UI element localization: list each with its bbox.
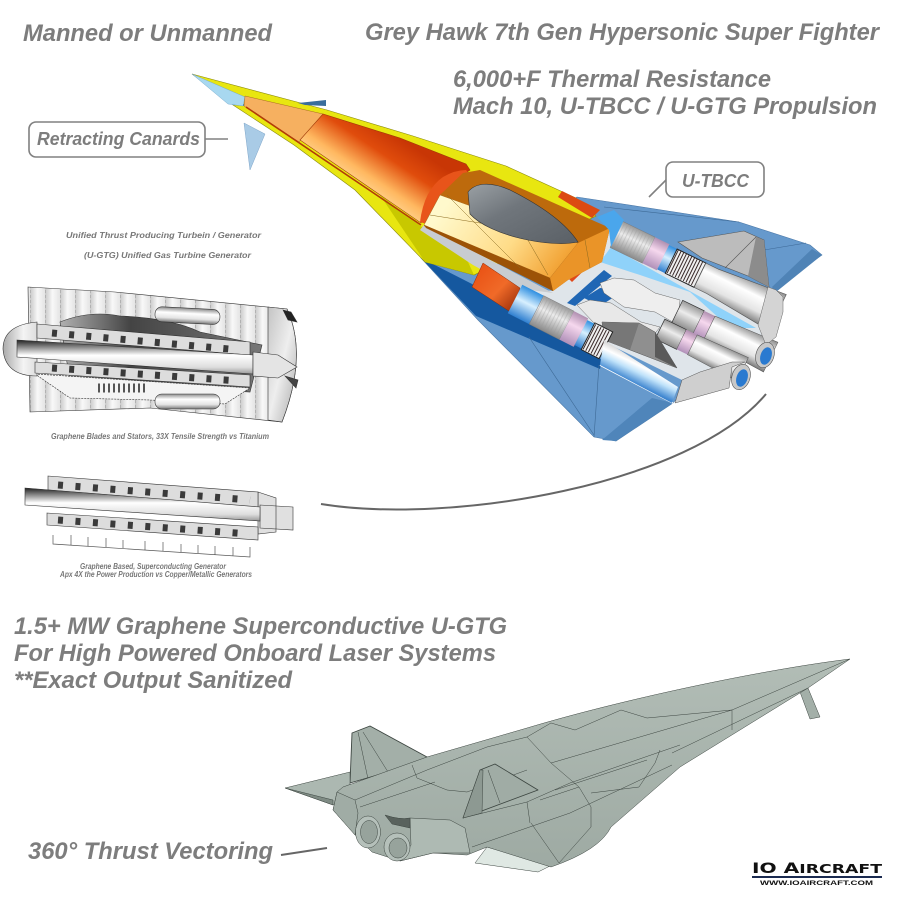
dark leading edge strip <box>421 258 602 369</box>
heading: specifications: Mach 10, U-TBCC / U-GTG Propulsion <box>453 93 877 120</box>
delta wing body <box>421 197 822 441</box>
callout: retracting canards: Retracting Canards <box>37 129 200 149</box>
title: grey hawk: Grey Hawk 7th Gen Hypersonic Super Fighter <box>365 19 881 46</box>
bay cooling duct <box>600 247 756 328</box>
lower row <box>47 513 258 540</box>
main orange fuselage <box>300 114 470 223</box>
rear fairing dark <box>385 815 410 828</box>
lower stator row <box>35 362 250 387</box>
rear housing <box>675 362 745 403</box>
tail cone <box>253 352 297 378</box>
wing facet dark <box>602 398 673 441</box>
orange arch frame <box>420 170 470 226</box>
dark vane <box>285 376 298 388</box>
fuselage <box>333 659 850 867</box>
red wedge under box <box>567 250 597 282</box>
lower pod <box>155 394 220 409</box>
upper red intake <box>558 191 600 218</box>
grey ellipse cavity <box>468 184 578 244</box>
callout: u-tbcc: U-TBCC <box>682 171 750 191</box>
nozzle upper <box>752 340 778 370</box>
lower red intake <box>472 263 520 313</box>
main cutaway aircraft <box>192 74 822 441</box>
wing highlight stripe <box>600 365 673 403</box>
upper stator blocks <box>52 333 240 350</box>
nacelle: upper right rear <box>670 297 778 372</box>
caption: generator <box>59 562 252 579</box>
shaft <box>25 488 260 521</box>
heading: laser power <box>14 613 507 694</box>
mid duct upper <box>600 278 680 325</box>
rear cowl lower <box>400 818 470 861</box>
nozzle right <box>384 833 410 861</box>
lower blocks <box>58 520 250 534</box>
forward orange section <box>244 96 323 142</box>
engine bay <box>520 230 776 380</box>
heading: laser power: 1.5+ MW Graphene Superconductive U-GTG <box>14 613 507 640</box>
nacelle: upper engine <box>608 216 786 330</box>
comb connector <box>53 535 250 557</box>
blue engine inlet cone <box>597 210 624 247</box>
fuselage panel lines <box>355 659 850 863</box>
dark blue nose edge <box>192 74 247 106</box>
callout: retracting canards <box>29 122 228 157</box>
dark inner compressor <box>60 314 262 392</box>
label: thrust vectoring: 360° Thrust Vectoring <box>28 838 273 865</box>
upper row <box>48 476 258 507</box>
shaft <box>17 340 253 374</box>
mid duct lower <box>577 300 660 340</box>
center fin <box>463 764 538 818</box>
upper pod <box>155 306 220 325</box>
canard <box>800 688 820 719</box>
upper blocks <box>58 485 250 500</box>
nozzle lower <box>728 362 754 392</box>
exterior aircraft <box>285 659 850 872</box>
dark rear edge <box>283 310 297 322</box>
turbine cutaway drawing <box>3 287 298 422</box>
dark blue bay frame <box>567 270 625 306</box>
lower fin <box>602 322 677 368</box>
red lower line <box>246 107 421 225</box>
hull lower shading <box>380 195 474 275</box>
logo: io aircraft <box>752 861 883 887</box>
logo: io aircraft: IO A IRCRAFT <box>752 861 883 877</box>
lower nacelle nozzle <box>600 340 678 403</box>
lower stator blocks <box>52 368 240 381</box>
lower fin <box>475 847 552 872</box>
nacelle: lower right rear <box>654 317 748 381</box>
light blue nose <box>192 74 245 106</box>
turbine blades light area <box>35 374 250 404</box>
generator drawing <box>25 476 293 557</box>
heading: specifications: 6,000+F Thermal Resistance <box>453 66 771 93</box>
connector arc <box>321 394 766 509</box>
icon: upper canard <box>298 100 326 106</box>
cutaway box <box>424 170 610 291</box>
left wing <box>285 772 350 805</box>
heading: specifications <box>453 66 877 120</box>
logo: io aircraft: WWW.IOAIRCRAFT.COM <box>760 880 873 887</box>
nacelle: lower engine <box>508 285 613 360</box>
end cap <box>258 492 293 534</box>
callout: u-tbcc <box>649 162 764 197</box>
text: turbine heading <box>66 231 262 260</box>
text: turbine heading: Unified Thrust Producing Turbein / Generator <box>66 231 262 240</box>
top fin <box>678 231 769 287</box>
icon: retracting canard <box>244 123 265 170</box>
caption: generator: Graphene Based, Superconducting Generator <box>80 562 227 571</box>
grey strip under box <box>420 225 553 293</box>
nozzle left <box>356 816 380 848</box>
rear opening left <box>333 792 358 835</box>
rear fin <box>350 726 427 783</box>
housing <box>28 287 296 422</box>
title: manned or unmanned: Manned or Unmanned <box>23 20 273 47</box>
wing tip face <box>772 249 822 292</box>
nose sphere <box>3 322 37 376</box>
arrow: thrust vectoring <box>281 848 327 855</box>
upper stator row <box>37 324 250 355</box>
turbine blade hatch <box>98 384 145 392</box>
caption: generator: Apx 4X the Power Production vs Copper/Metallic Generators <box>59 570 252 579</box>
caption: graphene blades: Graphene Blades and Stators, 33X Tensile Strength vs Titanium <box>51 432 269 441</box>
housing end <box>268 307 296 422</box>
heading: laser power: **Exact Output Sanitized <box>14 667 293 694</box>
wing panel lines <box>529 207 806 437</box>
heading: laser power: For High Powered Onboard Laser Systems <box>14 640 496 667</box>
text: turbine heading: (U-GTG) Unified Gas Turbine Generator <box>84 251 252 260</box>
right rim of housing <box>758 287 783 345</box>
yellow hull <box>192 74 596 275</box>
